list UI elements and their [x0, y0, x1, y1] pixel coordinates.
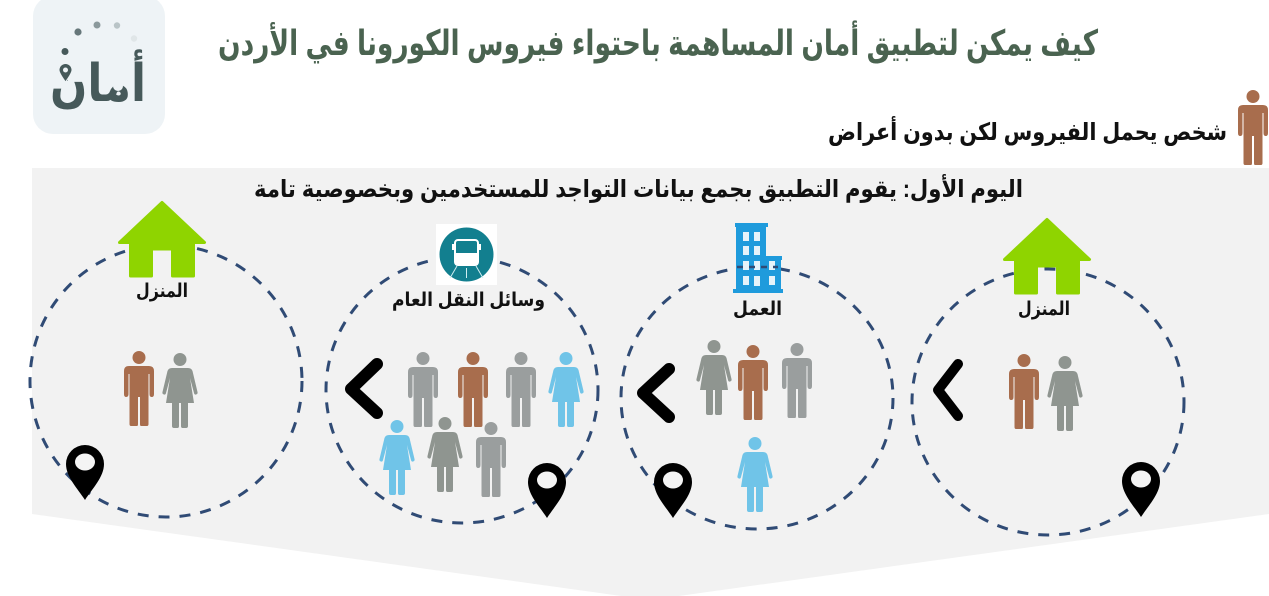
- icon: location pin: [1122, 462, 1160, 517]
- logo: Aman app: أمان: [50, 49, 146, 113]
- person: woman: [427, 417, 463, 492]
- panel: public transport: [326, 224, 598, 523]
- person: woman blue: [737, 437, 773, 512]
- label: home: المنزل: [136, 281, 188, 302]
- icon: location pin: [528, 463, 566, 518]
- panel: home (right): [912, 220, 1184, 535]
- person: man: [506, 352, 536, 427]
- icon: location pin: [654, 463, 692, 518]
- person: man: [782, 343, 812, 418]
- day one heading: اليوم الأول: يقوم التطبيق بجمع بيانات التواجد للمستخدمين وبخصوصية تامة: [254, 174, 1023, 203]
- person: carrier: [738, 345, 768, 420]
- person: man: [408, 352, 438, 427]
- panel: home (left): [30, 202, 302, 517]
- person: woman blue: [548, 352, 584, 427]
- icon: house: [1004, 220, 1090, 293]
- person: woman: [1047, 356, 1083, 431]
- label: work: العمل: [733, 299, 782, 320]
- person: woman: [162, 353, 198, 428]
- arrow: [351, 364, 377, 413]
- person: carrier: [458, 352, 488, 427]
- icon: location pin: [66, 445, 104, 500]
- label: home: المنزل: [1018, 299, 1070, 320]
- arrow: [938, 364, 958, 416]
- person: woman: [696, 340, 732, 415]
- arrow: [643, 369, 669, 417]
- person: man: [476, 422, 506, 497]
- legend: person carrying the virus without symptoms: [828, 90, 1268, 165]
- icon: office building: [733, 223, 783, 293]
- person: carrier: [124, 351, 154, 426]
- label: public transport: وسائل النقل العام: [392, 290, 545, 311]
- background panel with downward arrow shape: [32, 168, 1269, 596]
- icon: bus: [436, 224, 497, 285]
- person: woman blue: [379, 420, 415, 495]
- person: carrier: [1009, 354, 1039, 429]
- panel: work: [621, 223, 893, 529]
- logo: Aman app: [33, 0, 165, 134]
- icon: house: [120, 202, 204, 276]
